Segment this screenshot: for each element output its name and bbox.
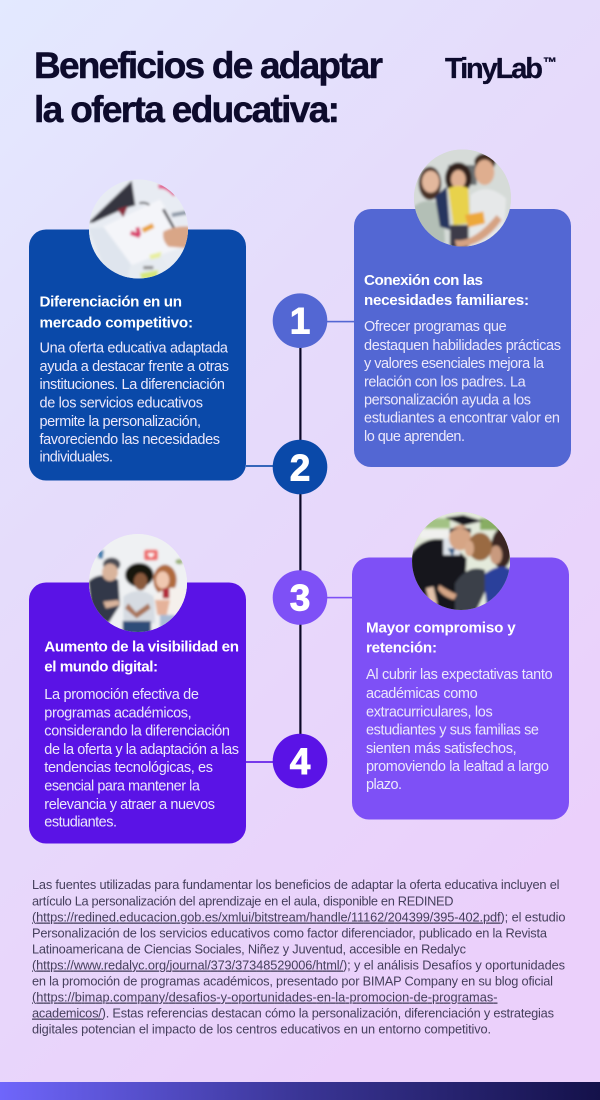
- card 1 heading: mercado competitivo:: [40, 315, 193, 332]
- card 1 body text: ayuda a destacar frente a otras: [40, 359, 229, 375]
- card 2 heading: Conexión con las: [364, 272, 483, 289]
- card 4 body text: relevancia y atraer a nuevos: [44, 797, 215, 813]
- card 4 body text: considerando la diferenciación: [44, 724, 230, 740]
- card 4 body text: estudiantes.: [44, 815, 117, 831]
- card 4 body text: de la oferta y la adaptación a las: [44, 742, 239, 758]
- card 4 body text: La promoción efectiva de: [44, 687, 199, 703]
- sources text block: academicos/). Estas referencias destacan cómo la personalización, diferenciación y estrategias: [32, 1006, 554, 1020]
- panel: card 3 compromiso: [352, 558, 569, 820]
- card 4 heading: [44, 639, 239, 676]
- card 2 heading: necesidades familiares:: [364, 292, 529, 309]
- sources text block: en la promoción de programas académicos, presentado por BIMAP Company en su blog oficial: [32, 974, 553, 988]
- title: [34, 45, 383, 130]
- card 2 body text: [364, 319, 561, 445]
- card 2 heading: [364, 272, 529, 309]
- connector: step 1 to card: [327, 321, 354, 322]
- card 4 heading: Aumento de la visibilidad en: [44, 639, 239, 656]
- card 3 body text: Al cubrir las expectativas tanto: [366, 667, 553, 683]
- bottom gradient bar: [0, 1082, 600, 1100]
- sources text block: [32, 877, 566, 1036]
- connector: step 3 to card: [327, 597, 352, 598]
- card 2 body text: y valores esenciales mejora la: [364, 356, 545, 372]
- card 1 body text: Una oferta educativa adaptada: [40, 341, 229, 357]
- step number 4: [273, 734, 327, 788]
- card 1 body text: instituciones. La diferenciación: [40, 377, 225, 393]
- card 1 body text: de los servicios educativos: [40, 396, 203, 412]
- sources text block: artículo La personalización del aprendizaje en el aula, disponible en REDINED: [32, 894, 454, 908]
- icon: photo of graduate and family: [412, 512, 510, 610]
- panel: card 1 diferenciación: [29, 230, 246, 480]
- icon: photo of paper and laptop on desk: [89, 180, 188, 278]
- card 3 body text: promoviendo la lealtad a largo: [366, 759, 549, 775]
- title: Beneficios de adaptar: [34, 45, 383, 86]
- icon: photo of three friends with phones: [89, 534, 187, 632]
- timeline vertical line: [299, 321, 302, 761]
- card 2 body text: lo que aprenden.: [364, 429, 465, 445]
- connector: step 2 to card: [246, 465, 273, 467]
- step number 3: 3: [290, 578, 310, 618]
- sources text block: (https://www.redalyc.org/journal/373/37348529006/html/); y el análisis Desafíos y oportunidades: [32, 958, 565, 972]
- card 3 body text: [366, 667, 553, 793]
- card 1 body text: individuales.: [40, 450, 113, 466]
- card 4 body text: esencial para mantener la: [44, 779, 201, 795]
- card 4 background: [29, 582, 246, 844]
- step number 3: [273, 570, 327, 625]
- step number 2: 2: [290, 448, 310, 488]
- card 3 body text: extracurriculares, los: [366, 705, 493, 721]
- card 4 body text: [44, 687, 239, 831]
- card 3 background: [352, 558, 569, 820]
- sources text block: digitales potencian el impacto de los centros educativos en un entorno competitivo.: [32, 1022, 491, 1036]
- card 2 body text: destaquen habilidades prácticas: [364, 338, 561, 354]
- step number 1: [273, 293, 327, 348]
- connector: step 4 to card: [246, 761, 273, 763]
- card 1 background: [29, 230, 246, 480]
- sources text block: Las fuentes utilizadas para fundamentar los beneficios de adaptar la oferta educativa incluyen el: [32, 877, 560, 892]
- card 3 body text: estudiantes y sus familias se: [366, 722, 539, 738]
- card 1 body text: permite la personalización,: [40, 414, 201, 430]
- logo: TinyLab: TinyLab: [445, 53, 543, 85]
- title: la oferta educativa:: [34, 89, 340, 130]
- sources text block: Latinoamericana de Ciencias Sociales, Niñez y Juventud, accesible en Redalyc: [32, 942, 467, 956]
- panel: card 2 conexión: [354, 209, 571, 467]
- card 3 body text: académicas como: [366, 686, 478, 702]
- card 4 body text: programas académicos,: [44, 706, 192, 722]
- sources text block: Personalización de los servicios educativos como factor diferenciador, publicado en la Revista: [32, 926, 548, 940]
- sources text block: (https://redined.educacion.gob.es/xmlui/bitstream/handle/11162/204399/395-402.pdf); el estudio: [32, 910, 566, 924]
- icon: photo of family: [414, 150, 511, 246]
- card 2 body text: estudiantes a encontrar valor en: [364, 411, 560, 427]
- card 4 heading: el mundo digital:: [44, 659, 158, 676]
- panel: card 4 visibilidad: [29, 582, 246, 844]
- card 3 heading: [366, 620, 516, 657]
- card 4 body text: tendencias tecnológicas, es: [44, 760, 213, 776]
- step number 2: [273, 440, 327, 494]
- card 2 body text: Ofrecer programas que: [364, 319, 507, 335]
- card 1 heading: [40, 294, 193, 332]
- card 2 background: [354, 209, 571, 467]
- card 3 heading: Mayor compromiso y: [366, 620, 516, 637]
- logo: TinyLab: ™: [543, 54, 557, 70]
- step number 1: 1: [290, 300, 310, 342]
- card 3 body text: plazo.: [366, 777, 402, 793]
- card 3 heading: retención:: [366, 640, 437, 657]
- card 2 body text: relación con los padres. La: [364, 375, 527, 391]
- sources text block: (https://bimap.company/desafios-y-oportunidades-en-la-promocion-de-programas-: [32, 990, 498, 1004]
- card 1 body text: [40, 341, 229, 466]
- step number 4: 4: [290, 741, 311, 782]
- card 3 body text: sienten más satisfechos,: [366, 741, 517, 757]
- card 1 body text: favoreciendo las necesidades: [40, 432, 220, 448]
- card 2 body text: personalización ayuda a los: [364, 392, 531, 408]
- card 1 heading: Diferenciación en un: [40, 294, 182, 311]
